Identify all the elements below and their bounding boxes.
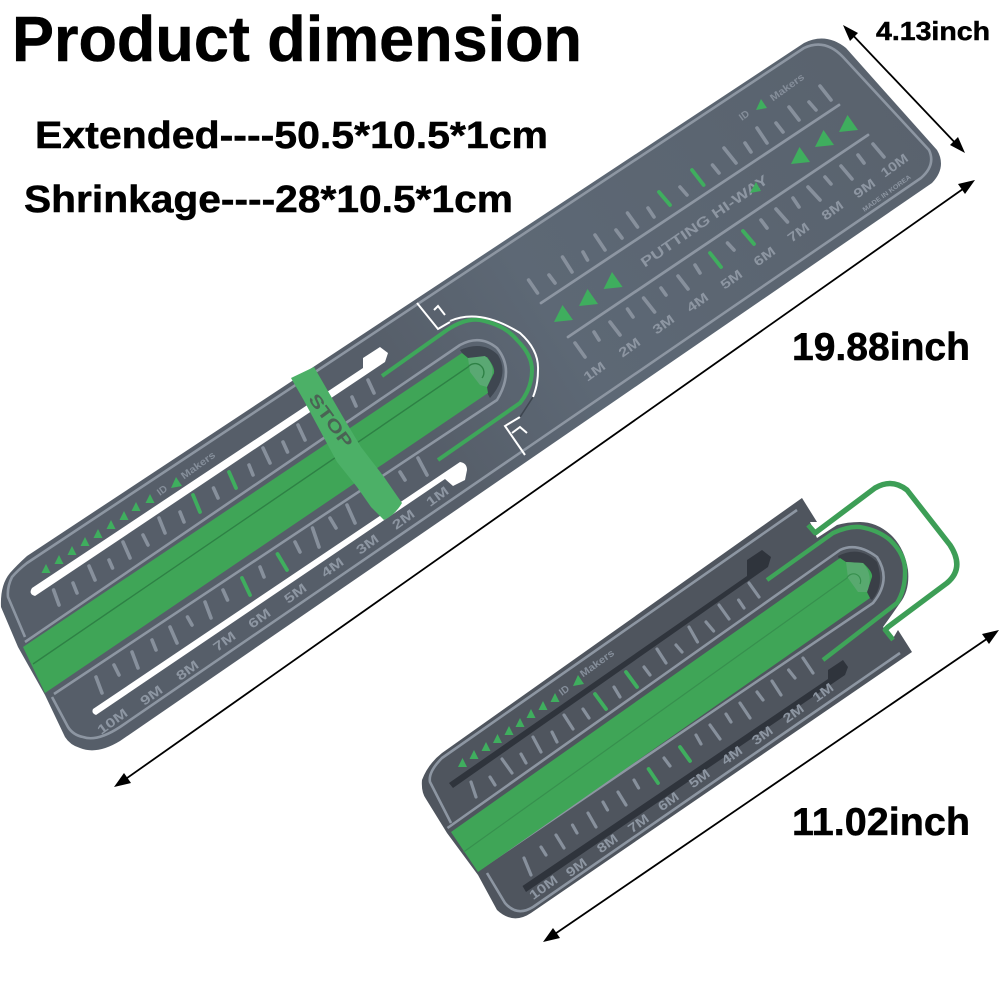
text: shrinkage size: Shrinkage----28*10.5*1cm <box>24 179 513 221</box>
distance labels: 7M <box>626 812 652 836</box>
ticks: right lower green <box>710 231 754 267</box>
distance labels: left: 2M <box>390 507 418 533</box>
text: extended size: Extended----50.5*10.5*1cm <box>35 115 548 157</box>
label: width: 4.13inch <box>876 16 990 46</box>
ticks: left upper lane <box>54 380 374 605</box>
green strip <box>451 558 872 872</box>
distance labels: 6M <box>656 790 682 814</box>
distance labels: right: 6M <box>751 244 779 270</box>
distance labels: 5M <box>687 767 713 791</box>
slot: upper <box>449 550 771 788</box>
distance labels: 2M <box>781 702 807 726</box>
distance labels: 4M <box>719 744 746 768</box>
distance labels: right: 9M <box>851 176 879 202</box>
label: shrunk length: 11.02inch <box>792 801 970 844</box>
track recess <box>838 552 880 600</box>
distance labels: right: 8M <box>819 198 847 224</box>
distance labels: right: 10M <box>878 151 911 181</box>
distance labels: 1M <box>810 681 837 705</box>
body <box>1 39 941 750</box>
arrow: extended length <box>114 180 975 787</box>
large triangles <box>554 115 858 322</box>
distance labels: 8M <box>595 832 621 856</box>
distance labels <box>527 681 837 903</box>
ticks: left lower green <box>242 554 287 595</box>
inner U border <box>25 340 506 694</box>
inner U border <box>448 547 884 868</box>
ticks: right lower row <box>575 144 884 357</box>
ticks: upper lane <box>471 583 759 797</box>
green strip <box>23 353 494 693</box>
slot: upper <box>31 347 388 596</box>
distance labels: right: 5M <box>718 267 746 293</box>
product name: PUTTING HI-WAY <box>638 172 771 271</box>
distance labels: 9M <box>564 856 590 880</box>
logo: left <box>155 450 218 498</box>
logo: left: Makers <box>179 450 218 482</box>
distance labels: left: 10M <box>95 706 131 738</box>
extended product <box>1 39 941 750</box>
title: Product dimension <box>12 3 582 75</box>
handle hooks <box>808 525 893 640</box>
distance labels: right: 1M <box>581 359 609 385</box>
distance labels: left: 6M <box>246 606 274 632</box>
inset border <box>8 45 931 738</box>
distance labels: 3M <box>750 724 776 748</box>
arrow: width <box>843 25 965 153</box>
distance labels: right: 2M <box>616 335 644 361</box>
ticks: upper green <box>595 672 637 709</box>
arrow: shrunk length <box>543 630 999 942</box>
joint shadow <box>520 397 533 417</box>
ticks: right upper green <box>659 170 704 205</box>
joint cut lines <box>417 303 538 455</box>
slot: lower <box>92 462 467 715</box>
logo: Makers <box>578 648 617 680</box>
body <box>422 498 912 918</box>
logo: left: ID <box>155 484 170 498</box>
label: extended length: 19.88inch <box>792 326 970 369</box>
distance labels: left: 8M <box>174 658 202 684</box>
shrunk product <box>422 483 957 918</box>
triangles <box>458 693 560 767</box>
ticks: right upper row <box>529 86 831 293</box>
ticks: left upper green <box>193 472 236 512</box>
distance labels: left: 9M <box>138 683 166 709</box>
distance labels: left: 3M <box>354 532 382 558</box>
handle <box>808 483 957 640</box>
logo <box>557 648 617 698</box>
stop band: STOP <box>304 390 356 452</box>
slot: lower <box>522 660 848 892</box>
distance labels: left: 5M <box>282 581 310 607</box>
distance labels: left <box>95 484 452 738</box>
distance labels: 10M <box>527 873 561 903</box>
distance labels: right: 7M <box>785 220 813 246</box>
distance labels: right: 3M <box>650 312 678 338</box>
distance labels: left: 4M <box>319 555 347 581</box>
logo: ID <box>557 684 572 698</box>
green outer U <box>382 320 532 460</box>
logo: right: ID <box>737 109 752 123</box>
made in korea: MADE IN KOREA <box>862 174 913 214</box>
ticks: lower green <box>649 747 690 783</box>
distance labels: right <box>581 151 911 385</box>
triangles: left row <box>42 494 154 573</box>
inset border <box>430 510 900 911</box>
green outer U <box>767 527 905 660</box>
stop band <box>291 367 402 520</box>
rails: right panel <box>541 105 868 337</box>
ticks: lower lane <box>524 658 813 875</box>
distance labels: left: 1M <box>424 484 452 510</box>
distance labels: right: 4M <box>684 290 712 316</box>
logo: right: Makers <box>768 72 807 104</box>
track recess <box>460 346 502 398</box>
logo: right <box>737 72 807 123</box>
ticks: left lower lane <box>96 458 427 693</box>
distance labels: left: 7M <box>211 629 239 655</box>
